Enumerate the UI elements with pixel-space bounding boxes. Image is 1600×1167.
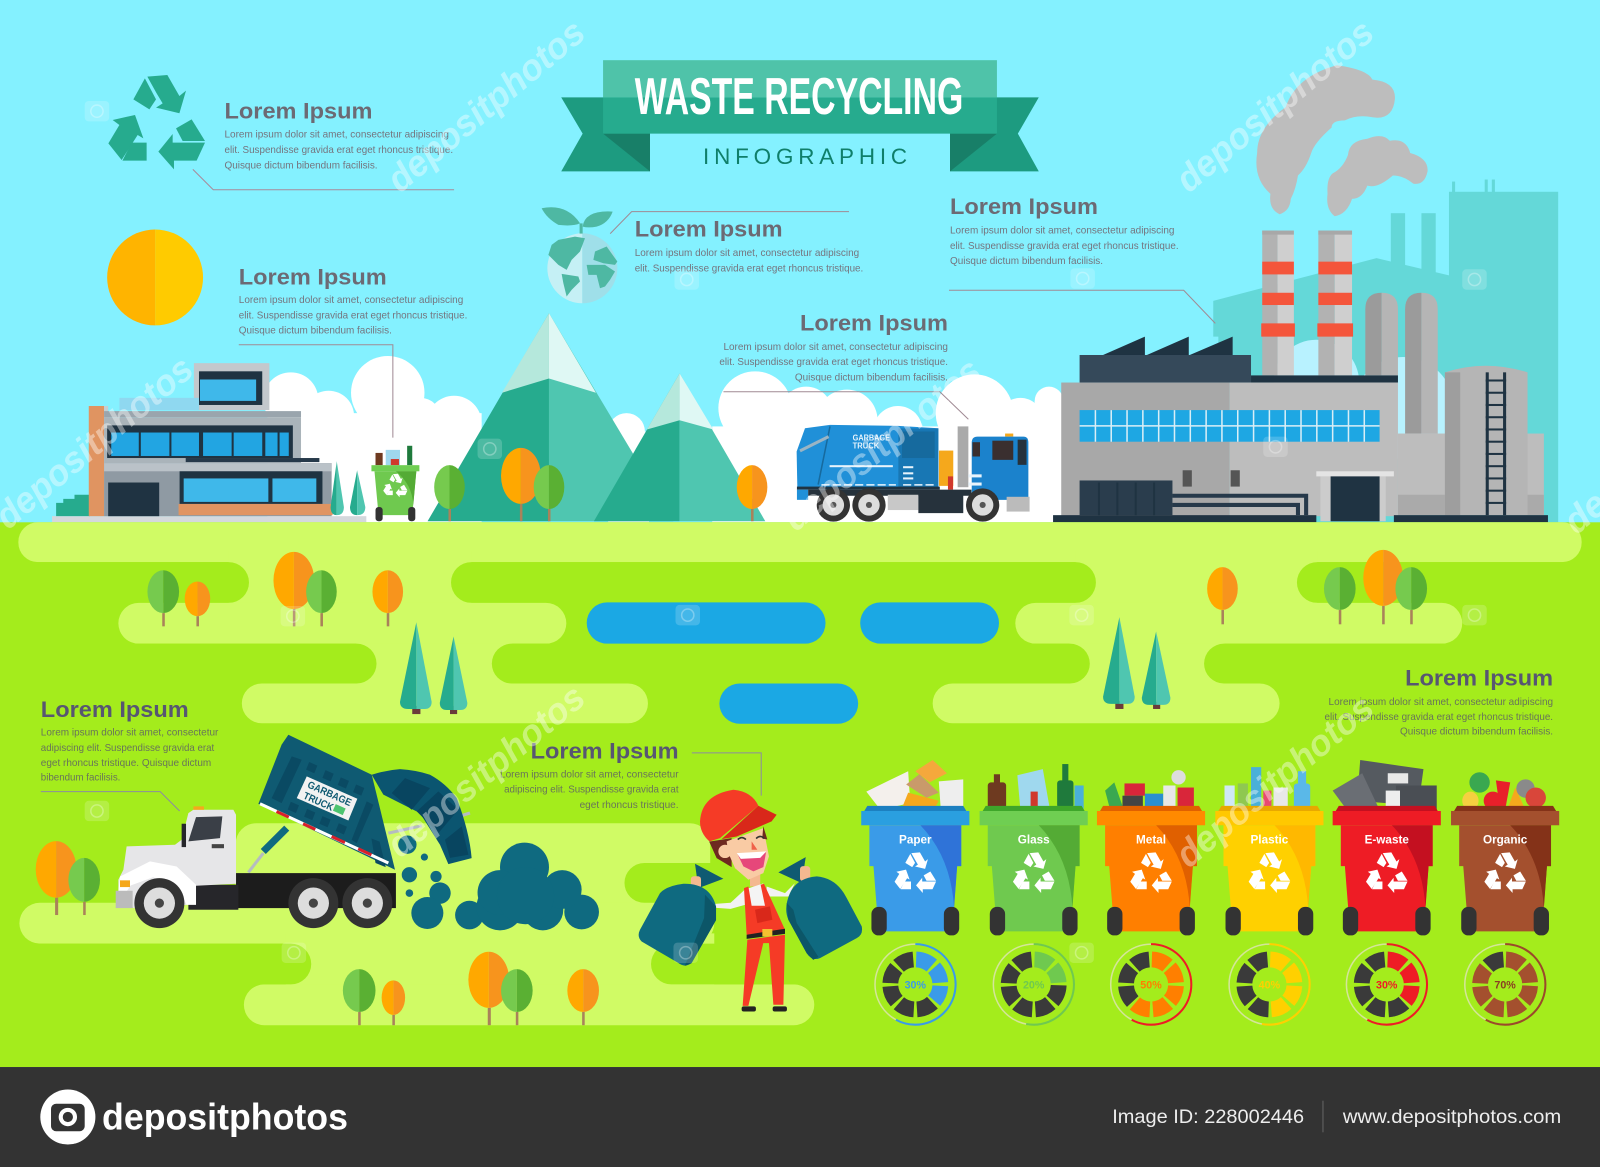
- trees right meadow: [1207, 550, 1427, 624]
- text block: truck: Lorem Ipsum: [800, 311, 948, 336]
- white dump truck: GARBAGE: [306, 780, 353, 809]
- gauge: organic 70%: [1465, 944, 1545, 1025]
- text block: bins: Lorem ipsum dolor sit amet, consectetur adipiscing: [1329, 697, 1553, 708]
- bin: organic: Organic: [1483, 834, 1528, 847]
- bin: paper: [861, 760, 969, 935]
- text block: factory: elit. Suspendisse gravida erat eget rhoncus tristique.: [950, 241, 1179, 252]
- text block: globe: Lorem ipsum dolor sit amet, consectetur adipiscing: [635, 248, 859, 259]
- worker with bags: [639, 790, 862, 1012]
- text block: dump truck: eget rhoncus tristique. Quisque dictum: [41, 758, 211, 769]
- mountains: [428, 313, 765, 521]
- bin: e-waste: [1333, 760, 1441, 935]
- gauge: plastic 40%: 40%: [1259, 979, 1281, 991]
- bin: e-waste: E-waste: [1365, 834, 1409, 847]
- text block: truck: elit. Suspendisse gravida erat eget rhoncus tristique.: [719, 357, 948, 368]
- grass ground: [0, 522, 1600, 1067]
- trees lower meadow: [343, 952, 599, 1025]
- text block: dump truck: Lorem ipsum dolor sit amet, consectetur: [41, 727, 219, 738]
- title text: WASTE RECYCLING: [635, 68, 963, 126]
- watermarks: depositphotos: [775, 350, 989, 539]
- footer logo icon: [40, 1089, 95, 1145]
- cypress trees on the grass: [400, 617, 1170, 714]
- text block: globe: elit. Suspendisse gravida erat eget rhoncus tristique.: [635, 263, 863, 274]
- watermarks: depositphotos: [379, 676, 593, 865]
- gauge: paper 30%: 30%: [905, 979, 926, 991]
- waste mound: [455, 843, 599, 930]
- text block: dump truck: [41, 697, 219, 811]
- text block: factory: Lorem Ipsum: [950, 194, 1098, 219]
- text block: worker: [500, 738, 761, 811]
- text block: household: elit. Suspendisse gravida erat eget rhoncus tristique.: [239, 310, 467, 321]
- footer logo wordmark: depositphotos: [102, 1096, 348, 1137]
- text block: recycling: Lorem ipsum dolor sit amet, consectetur adipiscing: [224, 130, 449, 141]
- text block: factory: Lorem ipsum dolor sit amet, consectetur adipiscing: [950, 226, 1174, 237]
- trees left of dump truck: [36, 841, 100, 915]
- gauge: e-waste 30%: [1346, 944, 1427, 1025]
- blue ponds: [587, 602, 999, 724]
- text block: bins: elit. Suspendisse gravida erat eget rhoncus tristique.: [1324, 712, 1553, 723]
- text block: dump truck: bibendum facilisis.: [41, 772, 120, 783]
- website: www.depositphotos.com: [1342, 1106, 1561, 1128]
- gauge: paper 30%: [875, 944, 956, 1025]
- bin: plastic: [1215, 767, 1323, 935]
- watermarks: depositphotos: [379, 11, 593, 200]
- watermarks: depositphotos: [1168, 686, 1382, 875]
- gauge: metal 50%: 50%: [1140, 979, 1162, 991]
- white dump truck: [116, 735, 472, 928]
- small green recycling bin: [371, 446, 419, 521]
- falling waste: [398, 835, 451, 929]
- gauge: e-waste 30%: 30%: [1376, 979, 1398, 991]
- text block: factory: [949, 194, 1215, 323]
- gauge: glass 20%: 20%: [1023, 979, 1045, 991]
- gauge: plastic 40%: [1229, 944, 1310, 1025]
- blue garbage truck: [797, 425, 1030, 522]
- text block: household: Quisque dictum bibendum facilisis.: [239, 326, 392, 337]
- sun: [107, 230, 203, 325]
- text block: bins: [1324, 666, 1553, 737]
- gauge: organic 70%: 70%: [1494, 979, 1516, 991]
- text block: recycling: elit. Suspendisse gravida erat eget rhoncus tristique.: [224, 145, 453, 156]
- footer bar: [0, 1067, 1600, 1167]
- blue garbage truck: TRUCK: [853, 440, 880, 450]
- text block: recycling: Quisque dictum bibendum facilisis.: [224, 160, 378, 171]
- trees on the skyline: [434, 448, 767, 521]
- smoke: [1256, 65, 1428, 216]
- watermarks: depositphotos: [1168, 11, 1382, 200]
- bin: organic: [1451, 772, 1559, 935]
- text block: worker: adipiscing elit. Suspendisse gravida erat: [504, 785, 679, 796]
- clouds: [263, 356, 1064, 522]
- factory background silhouette: [1213, 180, 1558, 522]
- text block: household: [239, 265, 467, 438]
- text block: globe: [610, 212, 863, 274]
- bin: glass: [980, 764, 1088, 935]
- text block: dump truck: adipiscing elit. Suspendisse gravida erat: [41, 743, 215, 754]
- text block: truck: Lorem ipsum dolor sit amet, consectetur adipiscing: [723, 342, 948, 353]
- text block: worker: Lorem ipsum dolor sit amet, consectetur: [500, 769, 679, 780]
- bin: metal: [1097, 770, 1205, 935]
- text block: truck: Quisque dictum bibendum facilisis.: [795, 373, 948, 383]
- bin: plastic: Plastic: [1250, 834, 1289, 847]
- text block: globe: Lorem Ipsum: [635, 217, 783, 242]
- text block: household: Lorem ipsum dolor sit amet, consectetur adipiscing: [239, 295, 463, 306]
- trees left meadow: [147, 552, 403, 626]
- text block: dump truck: Lorem Ipsum: [41, 697, 189, 722]
- text block: recycling: [193, 98, 454, 190]
- text block: recycling: Lorem Ipsum: [224, 98, 372, 123]
- text block: worker: Lorem Ipsum: [531, 738, 679, 763]
- bin: glass: Glass: [1018, 834, 1050, 847]
- bin: metal: Metal: [1136, 834, 1166, 847]
- icon: globe with sprout: [542, 207, 617, 303]
- text block: factory: Quisque dictum bibendum facilisis.: [950, 256, 1103, 267]
- gauge: metal 50%: [1111, 944, 1191, 1025]
- cypress trees near house: [331, 461, 365, 515]
- text block: bins: Lorem Ipsum: [1405, 666, 1553, 691]
- subtitle: INFOGRAPHIC: [703, 144, 907, 169]
- text block: bins: Quisque dictum bibendum facilisis.: [1400, 726, 1553, 737]
- factory: [1053, 231, 1548, 522]
- sky background: [0, 0, 1600, 530]
- gauge: glass 20%: [993, 944, 1074, 1025]
- blue garbage truck: GARBAGE: [853, 433, 890, 443]
- white dump truck: TRUCK: [301, 791, 335, 814]
- bin: paper: Paper: [899, 834, 932, 847]
- text block: household: Lorem Ipsum: [239, 265, 387, 290]
- pale cloud behind factory: [1273, 340, 1454, 459]
- icon: recycle symbol: [108, 75, 205, 169]
- title banner: [561, 60, 1039, 171]
- text block: truck: [719, 311, 968, 419]
- text block: worker: eget rhoncus tristique.: [580, 800, 679, 811]
- house: [52, 363, 366, 522]
- image id: Image ID: 228002446: [1112, 1106, 1304, 1128]
